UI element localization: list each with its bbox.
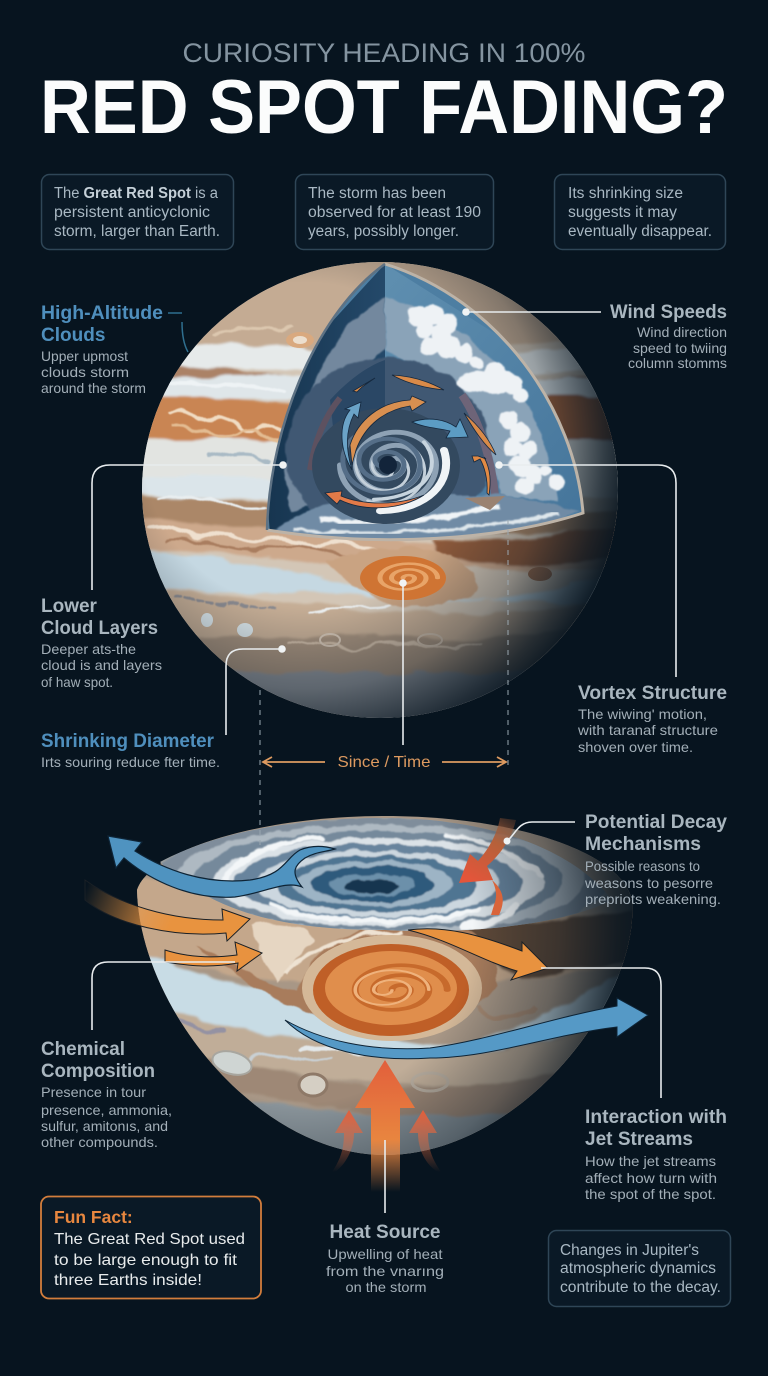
arrow: orange inflow lower	[165, 942, 262, 971]
label: Wind Speeds: Wind direction	[637, 324, 727, 340]
arrow: blue forked flow	[108, 836, 335, 897]
label: Lower Cloud Layers: Lower	[41, 596, 98, 617]
lower bands	[137, 877, 632, 1155]
arrows: rising heat	[332, 1060, 441, 1192]
label: High-Altitude Clouds: clouds storm	[41, 364, 129, 380]
label: Lower Cloud Layers: Deeper ats-the	[41, 641, 136, 657]
intro box: Great Red Spot: persistent anticyclonic	[54, 204, 210, 221]
label: Interaction with Jet Streams: Jet Streams	[585, 1129, 693, 1150]
label: Chemical Composition: Composition	[41, 1061, 155, 1082]
lower ovals	[181, 1040, 201, 1062]
right inner wall	[385, 266, 581, 512]
leader: shrinking diameter	[226, 645, 286, 735]
vortex core	[312, 408, 460, 524]
label: Potential Decay Mechanisms	[584, 812, 727, 907]
label: Interaction with Jet Streams: the spot of the spot.	[585, 1186, 716, 1202]
label: Lower Cloud Layers: of haw spot.	[41, 674, 113, 690]
intro box: Great Red Spot: storm, larger than Earth.	[54, 223, 220, 240]
label: Wind Speeds: Wind Speeds	[610, 302, 727, 323]
closing note box: contribute to the decay.	[560, 1279, 721, 1296]
cutaway wedge	[260, 264, 600, 545]
closing note box: Changes in Jupiter's	[560, 1242, 699, 1259]
label: Lower Cloud Layers: Cloud Layers	[41, 618, 158, 639]
intro box: observed duration: observed for at least 190	[308, 204, 481, 221]
label: High-Altitude Clouds: Upper upmost	[41, 348, 128, 364]
label: High-Altitude Clouds: around the storm	[41, 380, 146, 396]
intro box: shrinking size: suggests it may	[568, 204, 677, 221]
white cloud puffs	[406, 304, 564, 495]
label: Chemical Composition: sulfur, amitonıs, and	[41, 1118, 168, 1134]
label: Interaction with Jet Streams: How the jet streams	[585, 1153, 716, 1169]
fun fact callout: to be large enough to fit	[54, 1252, 238, 1269]
lower band details	[160, 1015, 385, 1060]
arrow: blue jet stream	[285, 998, 648, 1059]
label: Heat Source: from the vnarıng	[326, 1263, 444, 1279]
label: Lower Cloud Layers	[41, 596, 162, 690]
arrow: orange inflow upper	[85, 880, 250, 941]
fun fact callout: The Great Red Spot used	[54, 1231, 245, 1248]
label: Interaction with Jet Streams	[585, 1107, 727, 1202]
fun fact callout: three Earths inside!	[54, 1272, 202, 1289]
intro box: Great Red Spot: The Great Red Spot is a	[54, 185, 218, 202]
label: Vortex Structure: The wiwing' motion,	[578, 706, 707, 722]
intro box: observed duration: years, possibly longer.	[308, 223, 459, 240]
vortex floor	[268, 495, 578, 545]
label: Shrinking Diameter: Shrinking Diameter	[41, 731, 215, 752]
label: Vortex Structure	[577, 683, 727, 755]
intro box: shrinking size	[554, 174, 726, 250]
lower planet: sliced Jupiter bowl	[120, 810, 650, 1160]
upper planet: Jupiter sphere with cutaway	[41, 250, 730, 1306]
title: CURIOSITY HEADING IN 100%	[182, 38, 586, 68]
timeline: Since / Time	[263, 754, 506, 771]
cream turbulence	[250, 923, 312, 982]
closing note box: atmospheric dynamics	[560, 1260, 716, 1277]
label: Potential Decay Mechanisms: Possible reasons to	[585, 858, 700, 874]
arrow: orange jet	[408, 929, 548, 980]
label: Chemical Composition: Chemical	[41, 1039, 125, 1060]
label: Heat Source: Heat Source	[330, 1222, 440, 1243]
vortex flow arrows	[325, 375, 496, 508]
mid vortex chamber	[284, 356, 492, 510]
label: Potential Decay Mechanisms: prepriots weakening.	[585, 891, 721, 907]
fun fact callout	[41, 1196, 261, 1298]
label: Potential Decay Mechanisms: Mechanisms	[585, 834, 701, 855]
label: Lower Cloud Layers: cloud is and layers	[41, 657, 162, 673]
label: Heat Source	[326, 1222, 444, 1295]
leader: wind speeds	[462, 308, 601, 316]
shading	[130, 250, 630, 730]
leader: heat source	[384, 1140, 386, 1213]
label: Vortex Structure: Vortex Structure	[578, 683, 727, 704]
leader: vortex structure	[495, 461, 676, 677]
label: Wind Speeds	[610, 302, 727, 371]
label: Potential Decay Mechanisms: Potential Decay	[585, 812, 727, 833]
sphere surface bands	[142, 262, 618, 718]
label: High-Altitude Clouds	[41, 303, 163, 396]
leader: chemical composition	[92, 962, 235, 1030]
title: RED SPOT FADING?	[40, 65, 728, 150]
arrow: small red decay	[491, 880, 503, 915]
left wall clouds	[285, 298, 385, 512]
label: Vortex Structure: with taranaf structure	[577, 722, 718, 738]
painted white streaks	[225, 835, 540, 925]
lower planet shading	[137, 816, 632, 1155]
label: Wind Speeds: column stomms	[628, 355, 727, 371]
closing note box	[548, 1230, 730, 1306]
leader: interaction with jet streams	[541, 968, 661, 1098]
intro box: observed duration: The storm has been	[308, 185, 446, 202]
label: Interaction with Jet Streams: Interaction with	[585, 1107, 727, 1128]
label: Interaction with Jet Streams: affect how turn with	[585, 1170, 717, 1186]
turbulent swirl details	[150, 325, 480, 648]
leader: red spot	[399, 579, 407, 745]
wedge rim	[267, 264, 583, 540]
label: Wind Speeds: speed to twiing	[633, 340, 727, 356]
small storm ovals	[201, 613, 213, 627]
label: Shrinking Diameter	[41, 731, 220, 770]
intro box: shrinking size: eventually disappear.	[568, 223, 712, 240]
label: Shrinking Diameter: Irts souring reduce fter time.	[41, 754, 220, 770]
label: High-Altitude Clouds: Clouds	[41, 325, 105, 346]
label: Chemical Composition: other compounds.	[41, 1134, 158, 1150]
label: Vortex Structure: shoven over time.	[578, 739, 693, 755]
right wall cloud base	[385, 298, 558, 503]
timeline: Since / Time: Since / Time	[338, 754, 431, 771]
intro box: shrinking size: Its shrinking size	[568, 185, 683, 202]
red spot halo	[302, 935, 482, 1041]
label: Heat Source: on the storm	[346, 1279, 426, 1295]
swirl top face	[160, 818, 604, 931]
red spot halo	[325, 547, 478, 607]
leader: lower cloud layers	[92, 461, 287, 590]
intro box: observed duration	[296, 174, 494, 250]
intro box: Great Red Spot	[42, 174, 234, 250]
label: Chemical Composition	[41, 1039, 172, 1150]
label: High-Altitude Clouds: High-Altitude	[41, 303, 163, 324]
label: Chemical Composition: presence, ammonia,	[41, 1102, 172, 1118]
label: Potential Decay Mechanisms: weasons to pesorre	[584, 875, 713, 891]
dashed width guides	[260, 520, 508, 850]
label: Chemical Composition: Presence in tour	[41, 1084, 146, 1100]
great red spot	[360, 556, 446, 600]
label: Heat Source: Upwelling of heat	[328, 1246, 443, 1262]
leader: potential decay	[504, 822, 575, 844]
fun fact callout: Fun Fact:	[54, 1207, 133, 1227]
lower great red spot	[313, 944, 469, 1036]
left inner wall	[260, 264, 385, 535]
arrow: red decay inflow	[459, 818, 516, 883]
brown swoosh behind spot	[197, 930, 498, 1016]
leader: high-altitude clouds	[168, 313, 188, 352]
